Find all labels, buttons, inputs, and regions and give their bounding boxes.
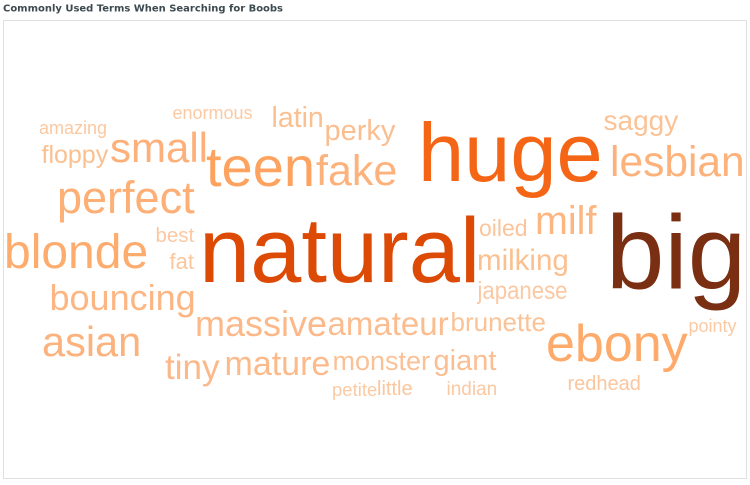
word: japanese: japanese xyxy=(477,277,568,305)
word: amazing: amazing xyxy=(39,118,107,138)
word: fake: fake xyxy=(316,147,397,195)
word: teen: teen xyxy=(206,135,315,198)
word: ebony: ebony xyxy=(546,315,688,373)
word: redhead: redhead xyxy=(568,373,641,395)
word: lesbian: lesbian xyxy=(610,139,745,186)
word: mature: mature xyxy=(224,345,330,383)
word: big: big xyxy=(606,194,746,312)
word: saggy: saggy xyxy=(604,105,678,136)
word: perky: perky xyxy=(324,115,396,147)
word: milf: milf xyxy=(535,199,597,243)
word: enormous: enormous xyxy=(172,103,253,123)
word: tiny: tiny xyxy=(165,348,220,387)
word: indian: indian xyxy=(446,379,497,400)
word: monster: monster xyxy=(332,346,430,376)
word: fat: fat xyxy=(170,249,194,274)
word: perfect: perfect xyxy=(57,172,195,223)
word: little: little xyxy=(377,378,413,400)
word: natural: natural xyxy=(199,200,480,302)
word: brunette: brunette xyxy=(450,307,546,337)
word: floppy: floppy xyxy=(42,141,109,169)
word: bouncing: bouncing xyxy=(50,277,196,318)
word: latin: latin xyxy=(272,102,324,134)
word: oiled: oiled xyxy=(479,215,528,241)
word: massive: massive xyxy=(195,303,327,344)
word: petite: petite xyxy=(332,379,377,400)
word: giant: giant xyxy=(434,345,496,377)
word: huge: huge xyxy=(418,106,603,199)
word: best: best xyxy=(156,224,195,247)
word: amateur: amateur xyxy=(328,305,449,342)
word: blonde: blonde xyxy=(4,226,148,279)
word: pointy: pointy xyxy=(688,316,737,336)
word: asian: asian xyxy=(42,318,141,365)
word: milking: milking xyxy=(477,244,569,277)
title: Commonly Used Terms When Searching for Boobs xyxy=(3,4,283,14)
word: small: small xyxy=(110,124,208,171)
